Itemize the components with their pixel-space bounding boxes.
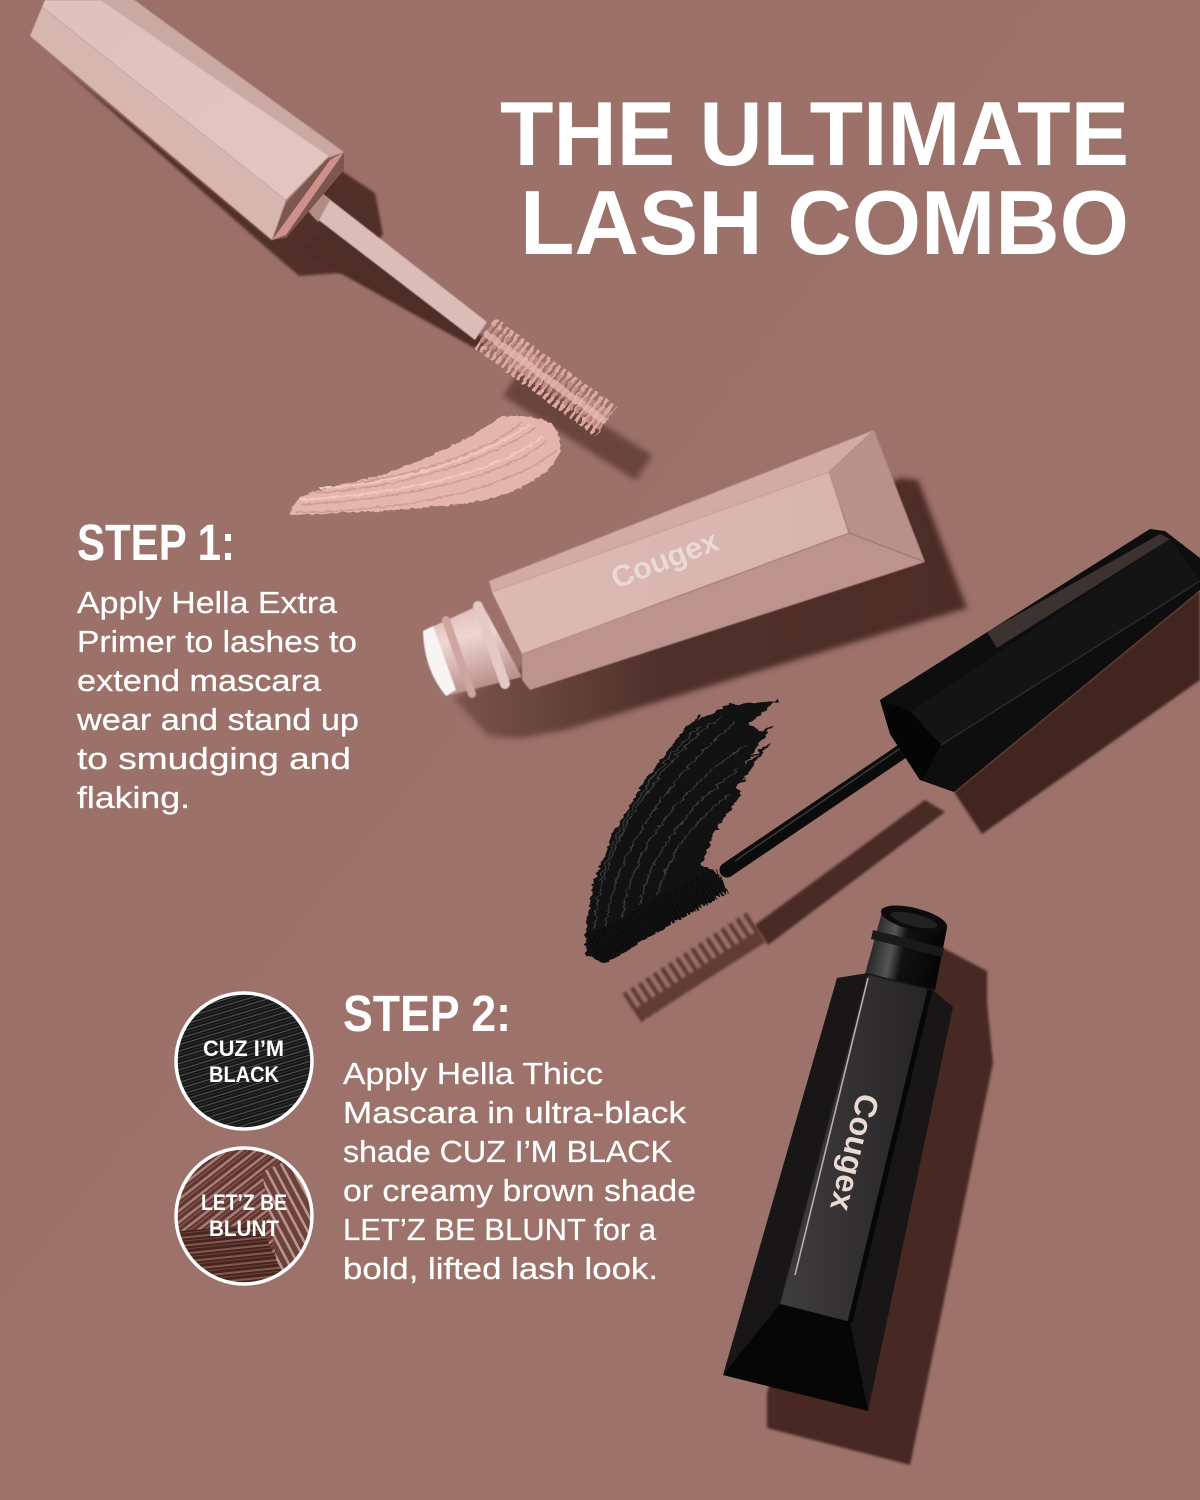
primer tube xyxy=(423,430,967,738)
cap right face xyxy=(100,0,344,157)
cap opening xyxy=(880,700,941,780)
step 2 text: shade CUZ I’M BLACK xyxy=(343,1134,672,1169)
tube logo: Cougex xyxy=(823,1090,886,1215)
step 1 text: Primer to lashes to xyxy=(77,624,357,659)
step 2 heading: STEP 2: xyxy=(343,985,511,1042)
step 1 text: flaking. xyxy=(77,780,190,815)
step 2 text xyxy=(343,1056,696,1286)
cap body xyxy=(880,529,1200,792)
step 2 text: Mascara in ultra-black xyxy=(343,1095,687,1130)
title: LASH COMBO xyxy=(520,173,1129,274)
brush xyxy=(485,333,606,422)
step 1 text: wear and stand up xyxy=(76,702,359,737)
bristle shadow xyxy=(632,926,762,1014)
tube logo: Cougex xyxy=(607,524,723,596)
step 1 heading: STEP 1: xyxy=(77,514,235,571)
step 2 text: Apply Hella Thicc xyxy=(343,1056,603,1091)
tube top face xyxy=(489,430,874,592)
step 2 text: or creamy brown shade xyxy=(343,1173,696,1208)
wand stem xyxy=(312,186,487,340)
white tip xyxy=(423,626,456,696)
wand stem xyxy=(727,746,910,870)
step 1 text: extend mascara xyxy=(77,663,322,698)
step 2 text: bold, lifted lash look. xyxy=(343,1251,658,1286)
tube end bevel xyxy=(829,430,925,562)
cap shadow xyxy=(954,590,1200,834)
cap opening xyxy=(272,152,344,240)
tube middle face xyxy=(492,472,849,654)
mascara wand with black cap xyxy=(586,529,1200,1014)
cap shadow xyxy=(54,60,383,276)
tube bottom face xyxy=(522,533,925,690)
tube shadow xyxy=(453,478,967,738)
mascara swatch xyxy=(586,700,778,964)
primer wand with cap xyxy=(30,0,644,468)
tube bevel xyxy=(723,1304,868,1411)
step 1 text: to smudging and xyxy=(77,741,351,776)
tube edge highlight xyxy=(795,978,868,1275)
brush shadow xyxy=(512,384,644,468)
black tube xyxy=(723,900,993,1465)
shade swatch: cuz i'm black: CUZ I’M xyxy=(203,1036,284,1061)
primer swatch xyxy=(290,416,561,515)
shade swatch: cuz i'm black: BLACK xyxy=(209,1062,279,1087)
shade swatch: cuz i'm black xyxy=(170,990,320,1135)
shade swatch: let'z be blunt: LET’Z BE xyxy=(201,1190,287,1215)
cap left face xyxy=(30,7,286,240)
cap centre face xyxy=(42,0,330,200)
shade swatch: let'z be blunt: BLUNT xyxy=(209,1216,280,1241)
mascara brush xyxy=(592,880,722,950)
step 1 text: Apply Hella Extra xyxy=(77,585,338,620)
title xyxy=(500,84,1129,274)
step 1 text xyxy=(76,585,359,815)
title: THE ULTIMATE xyxy=(500,84,1129,185)
tube shadow xyxy=(767,948,993,1465)
cap highlight face xyxy=(987,534,1170,648)
tube neck xyxy=(865,900,950,990)
step 2 text: LET’Z BE BLUNT for a xyxy=(343,1212,657,1247)
tube dark edge xyxy=(850,990,930,1322)
wand shadow xyxy=(755,800,945,945)
tube centre face xyxy=(780,975,930,1322)
shade swatch: let'z be blunt xyxy=(170,1145,320,1290)
wand shadow xyxy=(299,215,486,350)
tube neck xyxy=(423,604,522,696)
tube body xyxy=(723,973,953,1411)
